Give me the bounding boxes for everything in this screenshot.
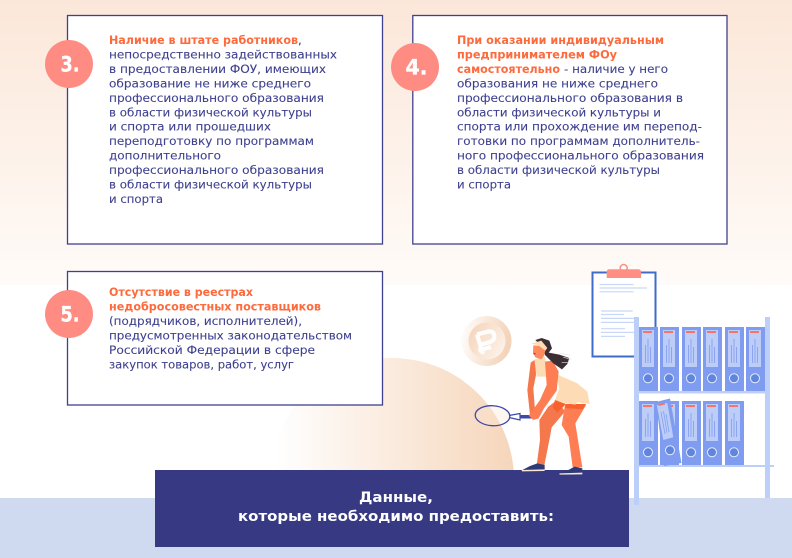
peach semicircle backdrop <box>270 358 514 480</box>
text: requirement 3: , <box>298 33 302 47</box>
figure <box>522 338 590 475</box>
text: requirement 4: образования не ниже среднего <box>457 76 658 90</box>
visor <box>531 341 547 351</box>
ground band <box>0 498 792 558</box>
text: requirement 5 <box>109 285 352 372</box>
dress <box>534 357 590 405</box>
text: requirement 5: Отсутствие в реестрах <box>109 285 253 299</box>
banner heading <box>238 490 554 525</box>
text: requirement 4: спорта или прохождение им перепод- <box>457 120 702 134</box>
text: requirement 3: Наличие в штате работников <box>109 33 298 47</box>
text: requirement 4: предпринимателем ФОу <box>457 48 617 62</box>
text: requirement 5: Российской Федерации в сфере <box>109 343 315 357</box>
binders: top row <box>639 327 765 391</box>
text: requirement 3: в предоставлении ФОУ, имеющих <box>109 62 326 76</box>
panel: requirement 4 <box>391 16 727 244</box>
text: requirement 4: в области физической культуры <box>457 163 660 177</box>
panel: requirement 5 <box>45 272 382 405</box>
text: requirement 4: области физической культуры и <box>457 105 661 119</box>
tilted binder <box>656 398 682 466</box>
racket <box>475 405 532 427</box>
shoes <box>522 463 545 470</box>
hair <box>535 338 569 369</box>
badge: number 4: 4. <box>406 56 428 80</box>
left leg <box>537 400 565 465</box>
text: requirement 3: и спорта <box>109 192 163 206</box>
face <box>533 345 545 359</box>
panel: requirement 3 <box>45 16 382 244</box>
banner heading: которые необходимо предоставить: <box>238 509 554 525</box>
text: requirement 5: (подрядчиков, исполнителей), <box>109 314 302 328</box>
text: requirement 5: закупок товаров, работ, услуг <box>109 358 294 372</box>
page background <box>0 0 792 285</box>
text: requirement 3: в области физической культуры <box>109 105 312 119</box>
badge: number 5 <box>45 290 93 338</box>
badge: number 3: 3. <box>60 52 80 76</box>
text: requirement 5: недобросовестных поставщиков <box>109 300 321 314</box>
text: requirement 4: ного профессионального образования <box>457 149 704 163</box>
text: requirement 3: переподготовку по программам <box>109 134 314 148</box>
text: requirement 4: готовки по программам дополнитель- <box>457 134 700 148</box>
right leg <box>562 405 586 467</box>
text: requirement 4: самостоятельно <box>457 62 560 76</box>
illustration: tennis player <box>475 338 590 475</box>
icon: ruble coin <box>462 316 512 366</box>
shadowed thigh <box>553 400 566 413</box>
text: requirement 4 <box>457 33 704 192</box>
text: requirement 4: профессионального образования в <box>457 91 683 105</box>
text: requirement 3: профессионального образования <box>109 91 324 105</box>
text: requirement 3: дополнительного <box>109 149 221 163</box>
text: requirement 4: При оказании индивидуальным <box>457 33 664 47</box>
badge: number 4 <box>391 43 439 91</box>
text: requirement 4: и спорта <box>457 178 511 192</box>
text: requirement 3: непосредственно задействованных <box>109 48 337 62</box>
text: requirement 3 <box>109 33 337 206</box>
banner heading: Данные, <box>359 490 433 506</box>
banner: data to provide <box>155 470 629 547</box>
binders: bottom row <box>639 401 744 465</box>
icon: clipboard <box>592 264 656 356</box>
text: requirement 3: образование не ниже среднего <box>109 76 311 90</box>
text: requirement 4: - наличие у него <box>564 62 668 76</box>
text: requirement 3: в области физической культуры <box>109 178 312 192</box>
badge: number 5: 5. <box>60 302 80 326</box>
shelf frame <box>634 317 774 505</box>
left arm <box>527 359 536 415</box>
text: requirement 3: и спорта или прошедших <box>109 120 271 134</box>
text: requirement 3: профессионального образования <box>109 163 324 177</box>
badge: number 3 <box>45 40 93 88</box>
text: requirement 5: предусмотренных законодательством <box>109 328 352 342</box>
right arm <box>529 361 559 420</box>
shelf with binders <box>634 317 774 505</box>
